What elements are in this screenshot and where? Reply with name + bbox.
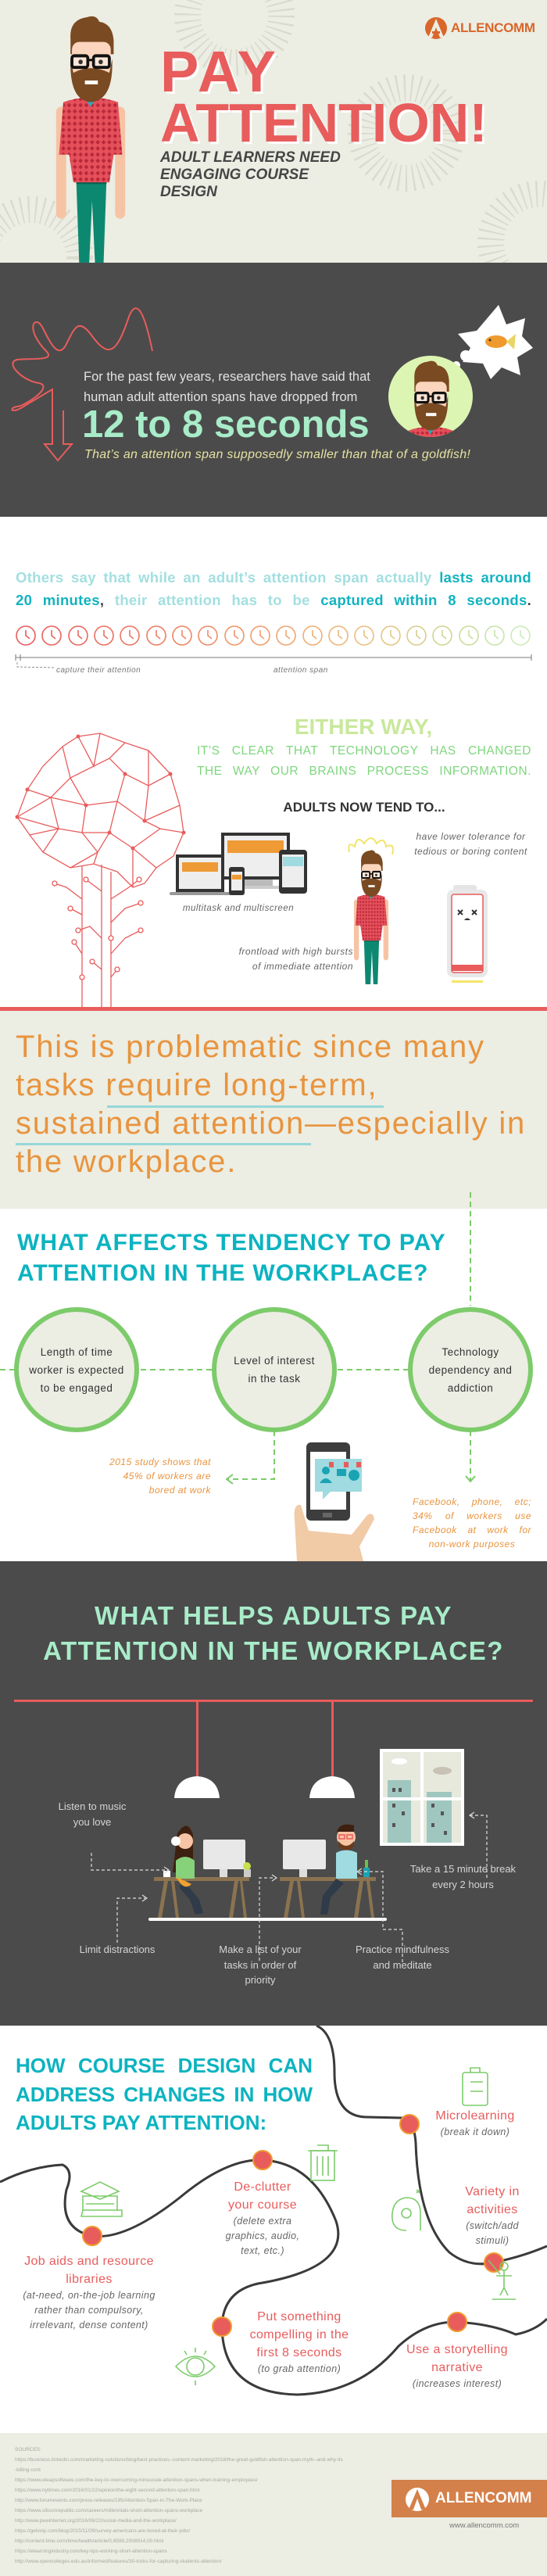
tip: job aids: rather than compulsory, [34,2305,144,2316]
footer [0,2433,547,2576]
tip: music: you love [73,1815,111,1828]
circle: level of interest: in the task [248,1373,301,1385]
tip: job aids: (at-need, on-the-job learning [23,2290,156,2301]
sources list: http://www.pewinternet.org/2016/06/22/social-media-and-the-workplace/ [15,2518,177,2524]
tip: storytelling: (increases interest) [413,2378,502,2389]
note: facebook: Facebook at work for [413,1524,531,1535]
tip: list [219,1944,302,1986]
goldfish note: That’s an attention span supposedly smaller than that of a goldfish! [84,448,470,461]
dashed connectors [0,1192,476,1485]
intro text: human adult attention spans have dropped from [84,390,357,404]
section: what helps [0,1561,547,2026]
note: facebook: 34% of workers use [413,1510,531,1521]
timeline labels: capture their attention [56,666,141,675]
title: ATTENTION! [160,92,488,153]
intro text [84,370,370,404]
tip: job aids [23,2255,156,2331]
tip: storytelling: Use a storytelling [406,2343,508,2356]
sources list: https://getvoip.com/blog/2015/11/09/survey-americans-are-bored-at-their-jobs/ [15,2528,190,2534]
sources list: http://content.time.com/time/health/article/0,8599,2008914,00.html [15,2538,163,2544]
illustration: excited man [348,837,394,984]
tip: job aids: Job aids and resource [24,2255,154,2268]
subtitle: ENGAGING COURSE [160,167,309,183]
note: 2015 study: 2015 study shows that 45% of workers are bored at work [109,1456,211,1496]
logo: allencomm top: ALLENCOMM [451,20,535,35]
circle: length of time [14,1307,139,1432]
sources list: http://www.forumevents.com/press-releases/195/Attention-Span-in-The-Work-Place [15,2498,202,2503]
sources list: SOURCES: [15,2447,41,2452]
text: sustained attention—especially in [16,1106,526,1141]
dashed pointers [91,1812,488,1962]
heading: what helps: WHAT HELPS ADULTS PAY [95,1601,452,1630]
tip: de-clutter: De-clutter [234,2180,291,2194]
text: technology changed brains [197,744,531,778]
sources list: https://www.eleapsoftware.com/the-key-to-overcoming-minuscule-attention-spans-when-training-employees/ [15,2477,258,2483]
text: others say: Others say that while an adult’s attention span actually lasts around [16,569,531,586]
section: problematic statement [0,1011,547,1209]
tip: compelling: compelling in the [250,2328,349,2341]
tip: list: tasks in order of [224,1959,296,1970]
tip: mindfulness [356,1944,449,1970]
heading: how course design: ADULTS PAY ATTENTION: [16,2111,266,2134]
heading: what affects [17,1230,446,1286]
heading: what helps: ATTENTION IN THE WORKPLACE? [43,1636,504,1665]
circle: length of time: Length of time [41,1346,113,1357]
heading: what affects: WHAT AFFECTS TENDENCY TO PAY [17,1230,446,1256]
text: tasks require long-term, [16,1068,377,1102]
tip: mindfulness: and meditate [373,1959,432,1970]
icon: dead battery [447,885,488,983]
tip: variety [465,2185,520,2246]
tip: job aids: irrelevant, dense content) [30,2320,148,2331]
illustration: circuit brain [16,733,186,1007]
text: technology changed brains: IT’S CLEAR THAT TECHNOLOGY HAS CHANGED [197,744,531,758]
subtitle [159,149,341,200]
heading: what helps [43,1601,504,1665]
heading: either way: EITHER WAY, [295,715,432,739]
note: facebook: non-work purposes [429,1539,515,1550]
heading: how course design: HOW COURSE DESIGN CAN [16,2054,313,2077]
subtitle: ADULT LEARNERS NEED [160,149,341,166]
tip: de-clutter: text, etc.) [241,2245,284,2256]
website: www.allencomm.com [449,2521,519,2530]
logo: allencomm top [425,17,535,39]
tip: compelling [250,2310,349,2374]
tip: list: Make a list of your [219,1944,302,1955]
illustration: bearded man [56,16,125,263]
tip: microlearning: (break it down) [441,2126,509,2137]
sources list: https://www.siliconrepublic.com/careers/millennials-short-attention-spans-workplace [15,2508,202,2513]
tip: variety: activities [467,2203,518,2216]
tip: de-clutter: (delete extra [234,2216,291,2227]
text: frontload [239,946,353,971]
circle: technology dependency: addiction [448,1382,493,1393]
squiggle arrow [11,307,153,461]
heading: how course design: ADDRESS CHANGES IN HOW [16,2083,313,2106]
text: others say [16,569,531,608]
logo: allencomm footer: ALLENCOMM [435,2490,531,2506]
illustration: lamps [14,1700,533,1798]
sources list: https://business.linkedin.com/marketing-solutions/blog/best-practices--content-marketing/2016/the-great-goldfish-attention-span-myth--and-why-its-killing-cont [15,2457,343,2473]
sources list: http://www.opencolleges.edu.au/informed/features/30-tricks-for-capturing-students-attention/ [15,2559,222,2564]
text: others say: 20 minutes, their attention has to be captured within 8 seconds. [16,592,531,608]
tip: storytelling [406,2343,508,2389]
icon: devices [170,833,307,895]
subtitle: DESIGN [160,184,217,200]
tip: variety: (switch/add [466,2220,519,2231]
circle: level of interest [212,1307,337,1432]
heading: what affects: ATTENTION IN THE WORKPLACE? [17,1260,428,1286]
tip: de-clutter: your course [228,2198,297,2212]
tip: variety: Variety in [465,2185,520,2198]
tip: de-clutter [225,2180,299,2256]
illustration: window [380,1749,464,1846]
text: attention span [274,666,328,675]
text: the workplace. [16,1145,237,1179]
illustration: man in circle thinking of goldfish [388,305,533,437]
header section [0,0,547,263]
text: lower tolerance: have lower tolerance for tedious or boring content [414,831,527,857]
tip: compelling: first 8 seconds [256,2346,342,2359]
title: PAY [160,39,279,104]
tip: microlearning [435,2109,515,2137]
tip: storytelling: narrative [431,2361,483,2374]
tip: compelling: (to grab attention) [258,2363,341,2374]
tip: music: Listen to music [59,1800,126,1812]
text: technology changed brains: THE WAY OUR BRAINS PROCESS INFORMATION. [197,765,531,778]
tip: microlearning: Microlearning [435,2109,515,2123]
intro text: For the past few years, researchers have said that [84,370,370,384]
text: This is problematic since many [16,1030,485,1064]
note: facebook: Facebook, phone, etc; [413,1496,531,1507]
big stat: 12 to 8 seconds: 12 to 8 seconds [82,403,370,446]
tip: variety: stimuli) [476,2235,509,2246]
heading: how course design [16,2054,313,2134]
note: facebook [413,1496,531,1550]
tip: break: Take a 15 minute break [410,1863,516,1875]
tip: list: priority [245,1974,275,1986]
circle: length of time: to be engaged [41,1382,113,1393]
section: attention spans dropped [0,263,547,517]
sources list: https://www.nytimes.com/2016/01/22/opinion/the-eight-second-attention-span.html [15,2488,199,2493]
tip: compelling: Put something [257,2310,341,2323]
circle: technology dependency [408,1307,533,1432]
illustration: desks with workers [148,1825,387,1921]
tip: de-clutter: graphics, audio, [226,2230,299,2241]
divider red [0,1007,547,1011]
illustration: hand with phone [294,1442,374,1561]
logo: allencomm footer [391,2480,547,2517]
sources list: https://elearningindustry.com/key-tips-working-short-attention-spans [15,2549,167,2554]
sources list [15,2447,343,2564]
text: multitask and multiscreen [183,904,294,913]
tip: job aids: libraries [66,2273,113,2286]
tip: mindfulness: Practice mindfulness [356,1944,449,1955]
tip: music [59,1800,126,1828]
heading: adults now tend to: ADULTS NOW TEND TO... [283,800,445,815]
tip: limit distractions: Limit distractions [80,1944,155,1955]
title [160,39,488,153]
tip: break [410,1863,516,1890]
tip: break: every 2 hours [432,1878,494,1890]
section: course design path [0,2026,547,2395]
circle: length of time: worker is expected [29,1363,124,1376]
circle: technology dependency: dependency and [429,1363,512,1376]
text: frontload: frontload with high bursts [239,946,353,957]
text: frontload: of immediate attention [252,960,353,971]
clocks timeline [16,625,531,668]
circle: level of interest: Level of interest [234,1355,315,1367]
circle: technology dependency: Technology [442,1346,499,1357]
